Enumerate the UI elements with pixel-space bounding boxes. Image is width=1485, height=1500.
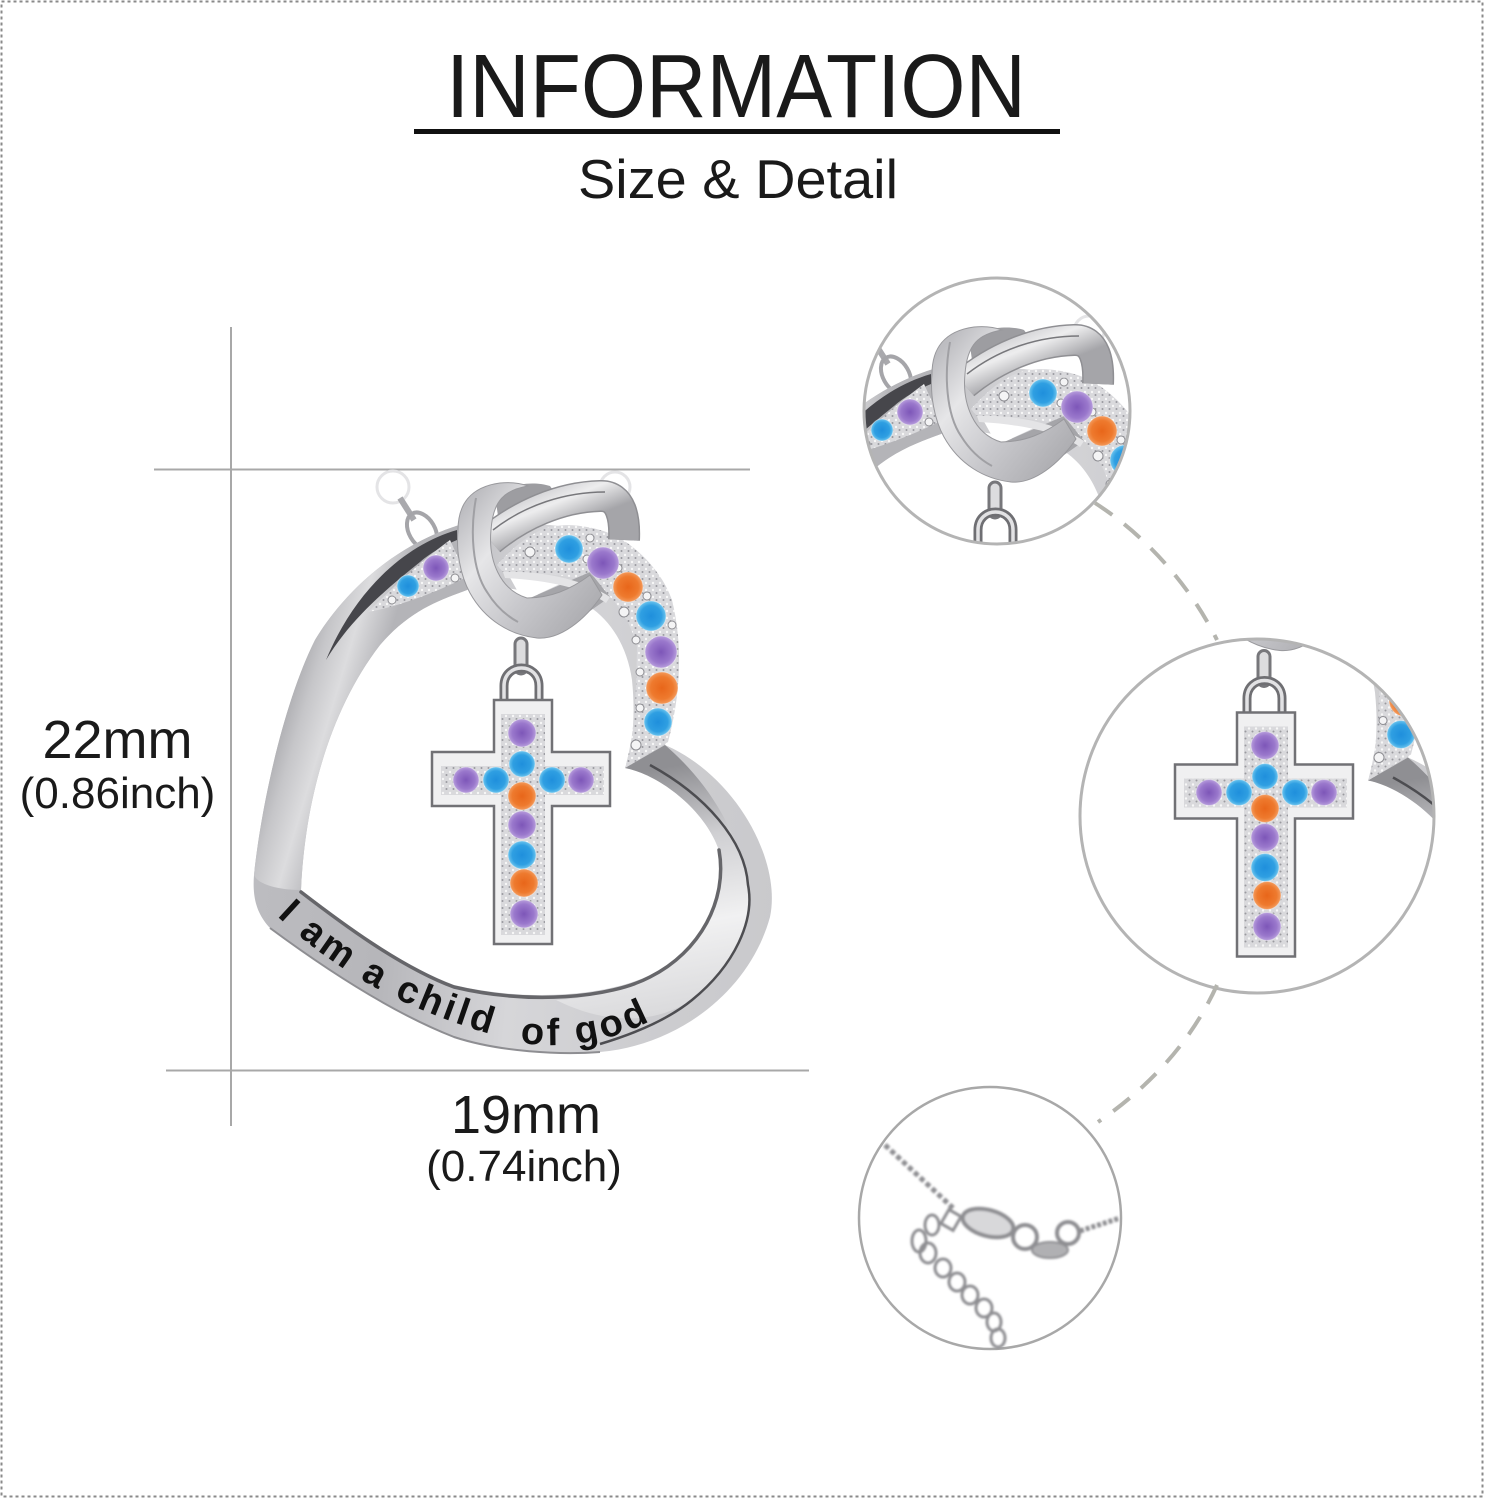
title underline bbox=[414, 129, 1060, 134]
subtitle: Size & Detail bbox=[578, 148, 898, 210]
height label: (0.86inch) bbox=[20, 769, 215, 818]
height label bbox=[20, 710, 215, 818]
dashed connector: middle to bottom circle bbox=[1098, 985, 1217, 1122]
detail circle: cross bbox=[1078, 638, 1436, 994]
width label: (0.74inch) bbox=[426, 1142, 622, 1191]
width label bbox=[426, 1085, 622, 1191]
engraved text on heart: I am a child of god bbox=[278, 898, 648, 1050]
chain and lobster clasp bbox=[885, 1145, 1120, 1347]
pendant necklace main image bbox=[254, 470, 772, 1054]
title: INFORMATION bbox=[446, 37, 1026, 137]
detail circle: knot and bail bbox=[862, 276, 1132, 546]
dimension lines bbox=[154, 327, 809, 1126]
height label: 22mm bbox=[42, 710, 193, 770]
detail circle: clasp and chain bbox=[859, 1087, 1121, 1349]
dashed connector: top to middle circle bbox=[1095, 503, 1217, 640]
width label: 19mm bbox=[451, 1085, 601, 1145]
